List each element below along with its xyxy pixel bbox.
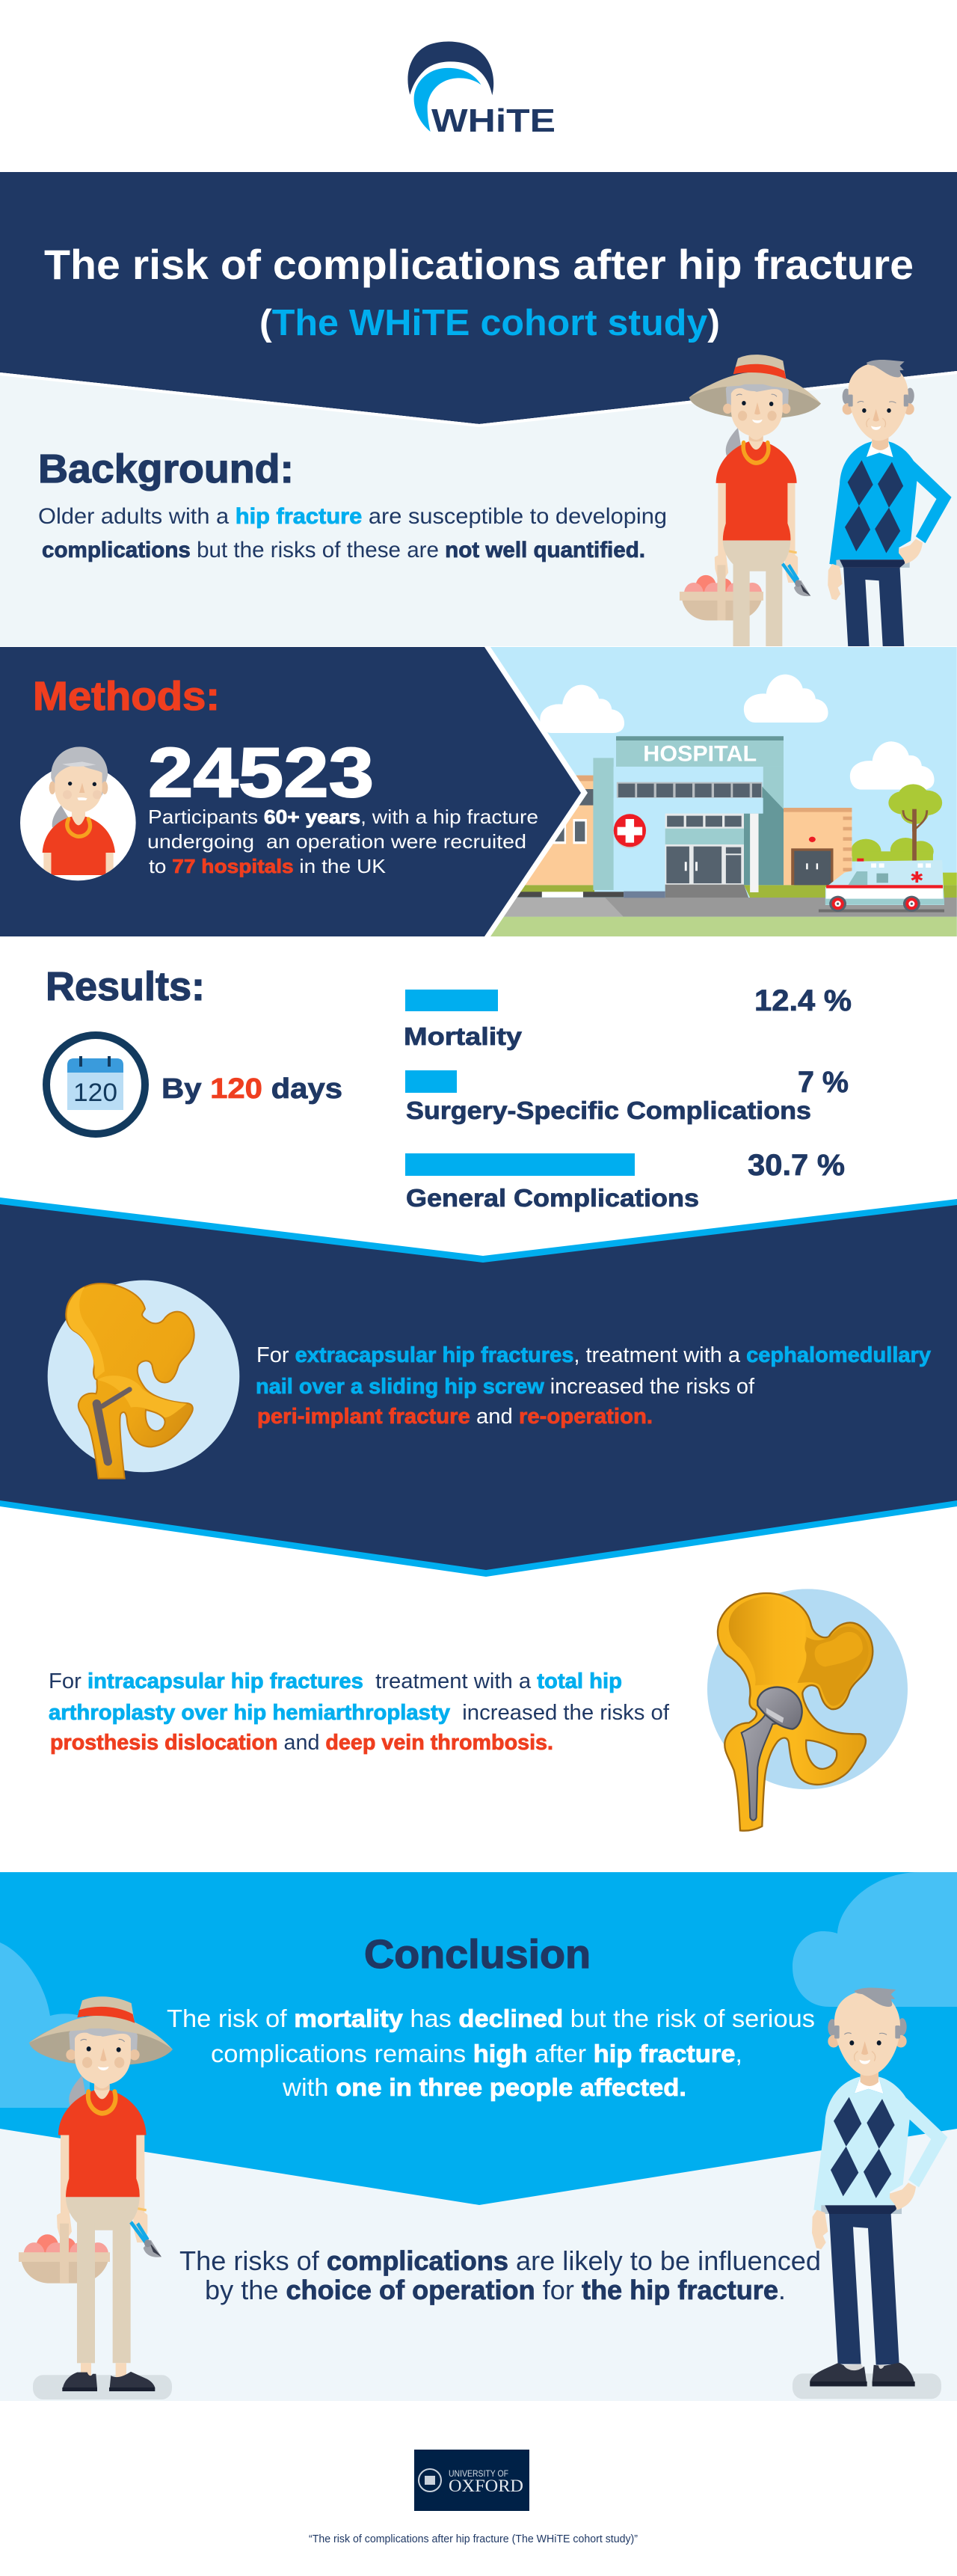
logo: University of Oxford xyxy=(414,2450,529,2511)
icon: calendar 120: 120 xyxy=(73,1079,117,1107)
bar: mortality: Mortality xyxy=(404,1022,523,1050)
stat: 24523 participants: 24523 xyxy=(148,733,374,812)
bar: surgery-specific complications: 7 % xyxy=(798,1066,849,1099)
logo: WHiTE: WHiTE xyxy=(431,102,556,139)
illustration: man in blue sweater xyxy=(828,360,951,646)
illustration: woman with hat and basket xyxy=(680,355,821,728)
text: intracapsular findings: prosthesis dislocation and deep vein thrombosis. xyxy=(50,1731,553,1755)
text: background statement xyxy=(38,504,667,562)
illustration: hospital scene xyxy=(478,647,957,936)
illustration: man full figure xyxy=(793,1987,947,2399)
text: extracapsular findings: For extracapsular hip fractures, treatment with a cephalomedullary xyxy=(256,1343,931,1367)
icon: woman portrait in circle xyxy=(20,746,136,880)
text: extracapsular findings: nail over a sliding hip screw increased the risks of xyxy=(256,1375,755,1399)
text: intracapsular findings: arthroplasty over hip hemiarthroplasty increased the risks of xyxy=(49,1701,670,1725)
text: operation choice statement: The risks of complications are likely to be influenced xyxy=(179,2245,821,2276)
text: conclusion statement xyxy=(167,2005,815,2101)
panel: conclusion xyxy=(0,1872,957,2401)
heading: Background: Background: xyxy=(38,447,294,491)
text: by 120 days: By 120 days xyxy=(161,1073,342,1105)
logo: WHiTE xyxy=(407,42,556,139)
bar: mortality: 12.4 % xyxy=(754,984,852,1017)
bar: general complications: 30.7 % xyxy=(748,1149,845,1182)
bar: surgery-specific complications xyxy=(405,1066,849,1124)
text: conclusion statement: with one in three people affected. xyxy=(282,2073,686,2101)
citation: “The risk of complications after hip fracture (The WHiTE cohort study)” xyxy=(309,2533,638,2545)
logo: University of Oxford: UNIVERSITY OF xyxy=(449,2468,508,2479)
icon: red cross xyxy=(614,814,646,848)
text: intracapsular findings xyxy=(49,1669,670,1755)
illustration: hip with cephalomedullary nail xyxy=(48,1281,239,1479)
icon: calendar 120 xyxy=(46,1035,145,1134)
heading: Results: Results: xyxy=(46,964,205,1009)
illustration: hip with total arthroplasty xyxy=(707,1589,908,1831)
bar: general complications xyxy=(405,1149,845,1212)
illustration: ambulance xyxy=(819,859,944,913)
sign: HOSPITAL: HOSPITAL xyxy=(643,741,757,766)
text: background statement: Older adults with a hip fracture are susceptible to developing xyxy=(38,504,667,529)
panel: intracapsular fractures xyxy=(49,1589,908,1831)
heading: Conclusion: Conclusion xyxy=(364,1932,591,1977)
text: methods description: to 77 hospitals in the UK xyxy=(149,855,387,877)
panel: title banner xyxy=(0,172,957,424)
panel: results xyxy=(46,964,852,1212)
text: conclusion statement: complications remains high after hip fracture, xyxy=(211,2040,742,2067)
logo: University of Oxford: OXFORD xyxy=(449,2477,523,2495)
text: background statement: complications but the risks of these are not well quantified. xyxy=(42,538,645,562)
text: operation choice statement xyxy=(179,2245,821,2305)
panel: extracapsular fractures xyxy=(0,1197,957,1577)
bar: general complications: General Complications xyxy=(406,1184,699,1212)
illustration: woman full figure xyxy=(19,1996,173,2399)
text: extracapsular findings xyxy=(256,1343,931,1429)
bar: surgery-specific complications: Surgery-Specific Complications xyxy=(406,1097,811,1124)
text: methods description: Participants 60+ years , with a hip fracture xyxy=(148,806,538,828)
bar: mortality xyxy=(404,984,852,1050)
panel: background xyxy=(0,355,957,646)
panel: methods xyxy=(0,647,957,936)
text: methods description: undergoing an operation were recruited xyxy=(147,830,526,853)
subtitle: (The WHiTE cohort study ) xyxy=(259,303,720,343)
title: The risk of complications after hip fracture xyxy=(44,241,914,288)
text: extracapsular findings: peri-implant fracture and re-operation. xyxy=(257,1405,653,1429)
text: operation choice statement: by the choice of operation for the hip fracture. xyxy=(205,2275,786,2305)
text: conclusion statement: The risk of mortality has declined but the risk of serious xyxy=(167,2005,815,2032)
text: methods description xyxy=(147,806,538,877)
heading: Methods: Methods: xyxy=(33,674,220,719)
text: intracapsular findings: For intracapsular hip fractures treatment with a total hip xyxy=(49,1669,622,1693)
